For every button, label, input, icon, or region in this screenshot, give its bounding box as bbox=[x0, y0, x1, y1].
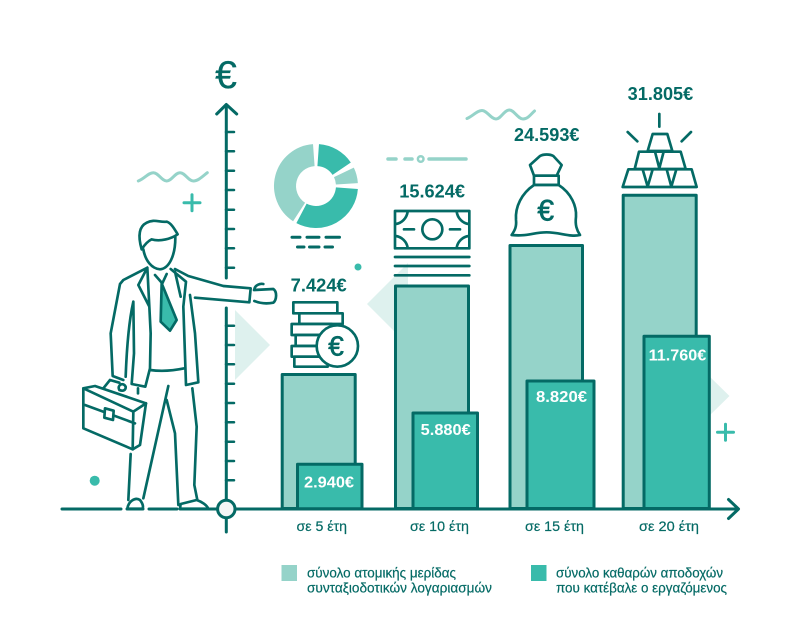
background triangle: right bbox=[708, 375, 730, 417]
bar group: 5 years: 2.940€ bbox=[304, 475, 354, 492]
donut chart bbox=[285, 155, 347, 217]
businessman figure bbox=[83, 221, 276, 509]
donut caption dashes bbox=[292, 237, 340, 247]
background triangle: middle bbox=[367, 263, 408, 345]
label: 15.624: 15.624€ bbox=[399, 182, 465, 202]
bar group: 20 years: 11.760€ bbox=[649, 348, 706, 365]
wave: left bbox=[138, 173, 207, 181]
background triangle: left bbox=[235, 310, 270, 380]
dashed timeline decoration bbox=[388, 156, 466, 162]
left shoe bbox=[127, 499, 143, 509]
icon: money bag bbox=[512, 154, 580, 236]
legend: individual share: σύνολο ατομικής μερίδας bbox=[307, 564, 456, 580]
hair bbox=[140, 221, 178, 249]
slice: teal top bbox=[318, 155, 342, 169]
x axis labels: σε 10 έτη bbox=[410, 518, 469, 534]
bar group: 20 years bbox=[623, 195, 709, 508]
x axis labels: σε 15 έτη bbox=[525, 518, 584, 534]
jacket and arms bbox=[111, 268, 251, 393]
tie knot bbox=[155, 274, 167, 283]
x axis labels: σε 20 έτη bbox=[639, 518, 699, 534]
x axis labels: σε 5 έτη bbox=[296, 518, 347, 534]
bar group: 10 years bbox=[396, 286, 478, 508]
horizontal axis bbox=[62, 500, 738, 518]
bar group: 10 years: 5.880€ bbox=[421, 422, 471, 439]
legend: net contributions: σύνολο καθαρών αποδοχών bbox=[556, 564, 723, 580]
icon: coins: € bbox=[328, 330, 344, 361]
slice: light left bbox=[285, 155, 314, 212]
plus: left bbox=[184, 195, 200, 211]
bar group: 5 years bbox=[282, 374, 362, 509]
label: 24.593: 24.593€ bbox=[514, 125, 580, 145]
right shoe bbox=[180, 500, 208, 509]
label: 31.805: 31.805€ bbox=[628, 84, 693, 104]
bar group: 15 years bbox=[510, 246, 594, 508]
legend: net contributions: που κατέβαλε ο εργαζόμενος bbox=[556, 580, 727, 596]
trousers bbox=[128, 386, 197, 505]
legend: individual share bbox=[282, 564, 492, 596]
briefcase bbox=[83, 380, 146, 449]
icon: coins bbox=[292, 302, 358, 367]
dot: centre bbox=[354, 264, 362, 270]
tie bbox=[161, 283, 177, 331]
hand bbox=[254, 284, 276, 303]
x axis labels bbox=[296, 518, 699, 534]
euro axis symbol: € bbox=[215, 54, 237, 97]
axis origin circle bbox=[218, 500, 235, 518]
legend: net contributions bbox=[531, 564, 727, 596]
face bbox=[143, 237, 175, 269]
slice: light small bbox=[344, 172, 347, 184]
dot: lower left bbox=[90, 476, 100, 486]
vertical axis bbox=[217, 104, 237, 532]
icon: gold bars bbox=[623, 114, 697, 187]
wave: right bbox=[467, 110, 534, 119]
legend: individual share: συνταξιοδοτικών λογαριασμών bbox=[307, 580, 492, 596]
label: 7.424: 7.424€ bbox=[291, 276, 347, 296]
bar group: 15 years: 8.820€ bbox=[536, 389, 587, 406]
plus: right bbox=[718, 424, 734, 440]
slice: teal bottom bbox=[302, 188, 347, 217]
icon: banknote bbox=[395, 211, 469, 275]
icon: money bag: € bbox=[537, 195, 554, 228]
